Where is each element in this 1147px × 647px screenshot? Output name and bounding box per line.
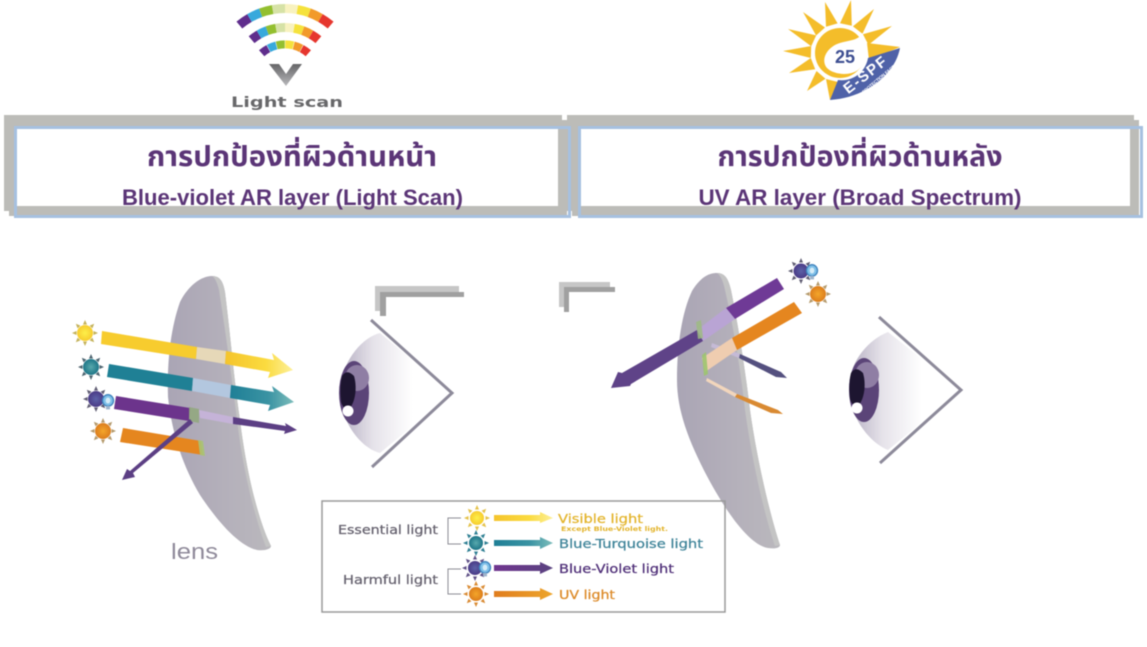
legend row: blue-turquoise light: Blue-Turquoise light [559,537,703,551]
logo: Light scan [231,8,343,111]
bracket mark right [559,282,615,312]
panel: front surface title [4,115,570,216]
icon: V mark [269,64,302,86]
legend brackets [448,518,461,594]
legend row: visible light: Visible light [558,512,643,526]
legend row: blue-violet light [462,555,674,581]
subheading: front: Blue-violet AR layer (Light Scan) [122,185,463,210]
subheading: back: UV AR layer (Broad Spectrum) [698,185,1022,210]
beam: visible light [101,331,293,378]
lens label: lens [171,539,218,564]
icon: orange sun [90,418,116,444]
icon: violet sun and bulb [83,386,114,412]
legend [322,501,725,612]
lens [677,273,780,548]
diagram: front surface [72,276,297,564]
legend row: UV light: UV light [559,588,615,602]
badge small print: EYE-SUN PROTECTION FACTOR [845,60,901,108]
eye: front diagram [339,320,452,467]
reflected blue-violet arrow [122,419,193,480]
icon: sun rays [783,0,900,100]
icon: turquoise sun [78,354,104,380]
panel: back surface title [567,115,1142,216]
heading: Thai front: การปกป้องที่ผิวด้านหน้า [147,136,437,179]
badge label: E-SPF [840,53,890,98]
icon: yellow sun [72,320,98,346]
beam: reflected blue-violet [611,278,784,388]
beam: thin reflected UV [706,378,783,414]
legend row: visible light: Except Blue-Violet light. [561,526,668,533]
lens [168,276,271,550]
badge number: 25 [835,47,855,67]
eye: back diagram [849,317,961,463]
icon: rainbow signal arcs [239,8,331,53]
diagram: back surface [611,258,831,548]
icon: violet sun and bulb [788,258,818,284]
legend group: harmful light: Harmful light [343,573,438,587]
heading: Thai back: การปกป้องที่ผิวด้านหลัง [718,136,1002,179]
bracket mark left [375,286,464,316]
icon: blue E-SPF band [830,48,900,100]
logo wordmark: Light scan [231,95,343,111]
beam: blue-violet light [114,396,297,434]
icon: orange sun [805,281,831,307]
legend row: blue-violet light: Blue-Violet light [559,562,674,576]
legend row: visible light [464,505,668,533]
legend row: UV light [463,581,615,607]
icon: sun disc [813,26,867,80]
legend group: essential light: Essential light [338,523,438,537]
beam: UV [702,302,802,376]
beam: UV light [120,428,205,456]
logo: E-SPF 25 [783,0,901,108]
icon: white swoosh [824,33,867,74]
beam: thin reflected violet [711,343,787,378]
legend row: blue-turquoise light [463,530,703,556]
beam: blue-turquoise light [107,364,294,411]
